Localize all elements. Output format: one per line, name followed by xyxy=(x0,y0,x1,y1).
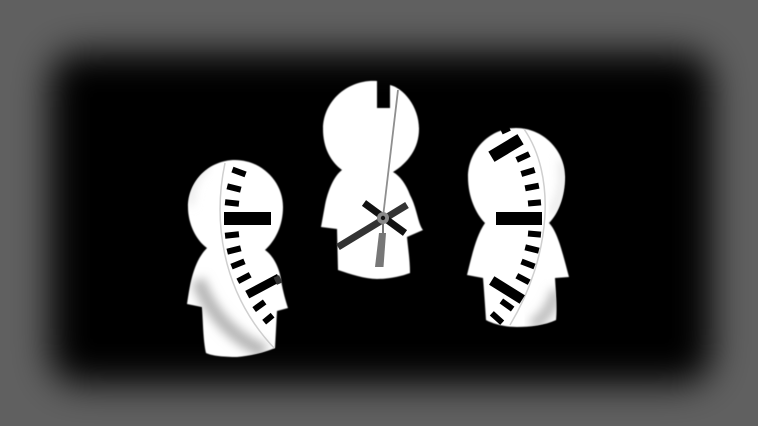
figure silhouette xyxy=(321,81,423,279)
figure silhouette xyxy=(187,160,288,357)
second bar xyxy=(364,203,405,233)
strap highlight xyxy=(274,275,282,285)
clock tick marks xyxy=(488,134,542,325)
figure: left clock figure xyxy=(187,160,288,357)
clock hands xyxy=(338,90,407,267)
top notch xyxy=(500,125,511,134)
stem xyxy=(382,218,384,234)
figure silhouette xyxy=(467,128,569,327)
minute hand xyxy=(383,90,398,217)
figure: right clock figure xyxy=(467,125,569,327)
page curl shading xyxy=(190,163,276,352)
hub xyxy=(377,212,389,224)
counterweight xyxy=(375,233,386,267)
page curl shading xyxy=(510,129,564,326)
hour hand xyxy=(338,205,407,247)
figure: center clock figure xyxy=(321,81,423,279)
clock tick marks xyxy=(224,167,281,325)
